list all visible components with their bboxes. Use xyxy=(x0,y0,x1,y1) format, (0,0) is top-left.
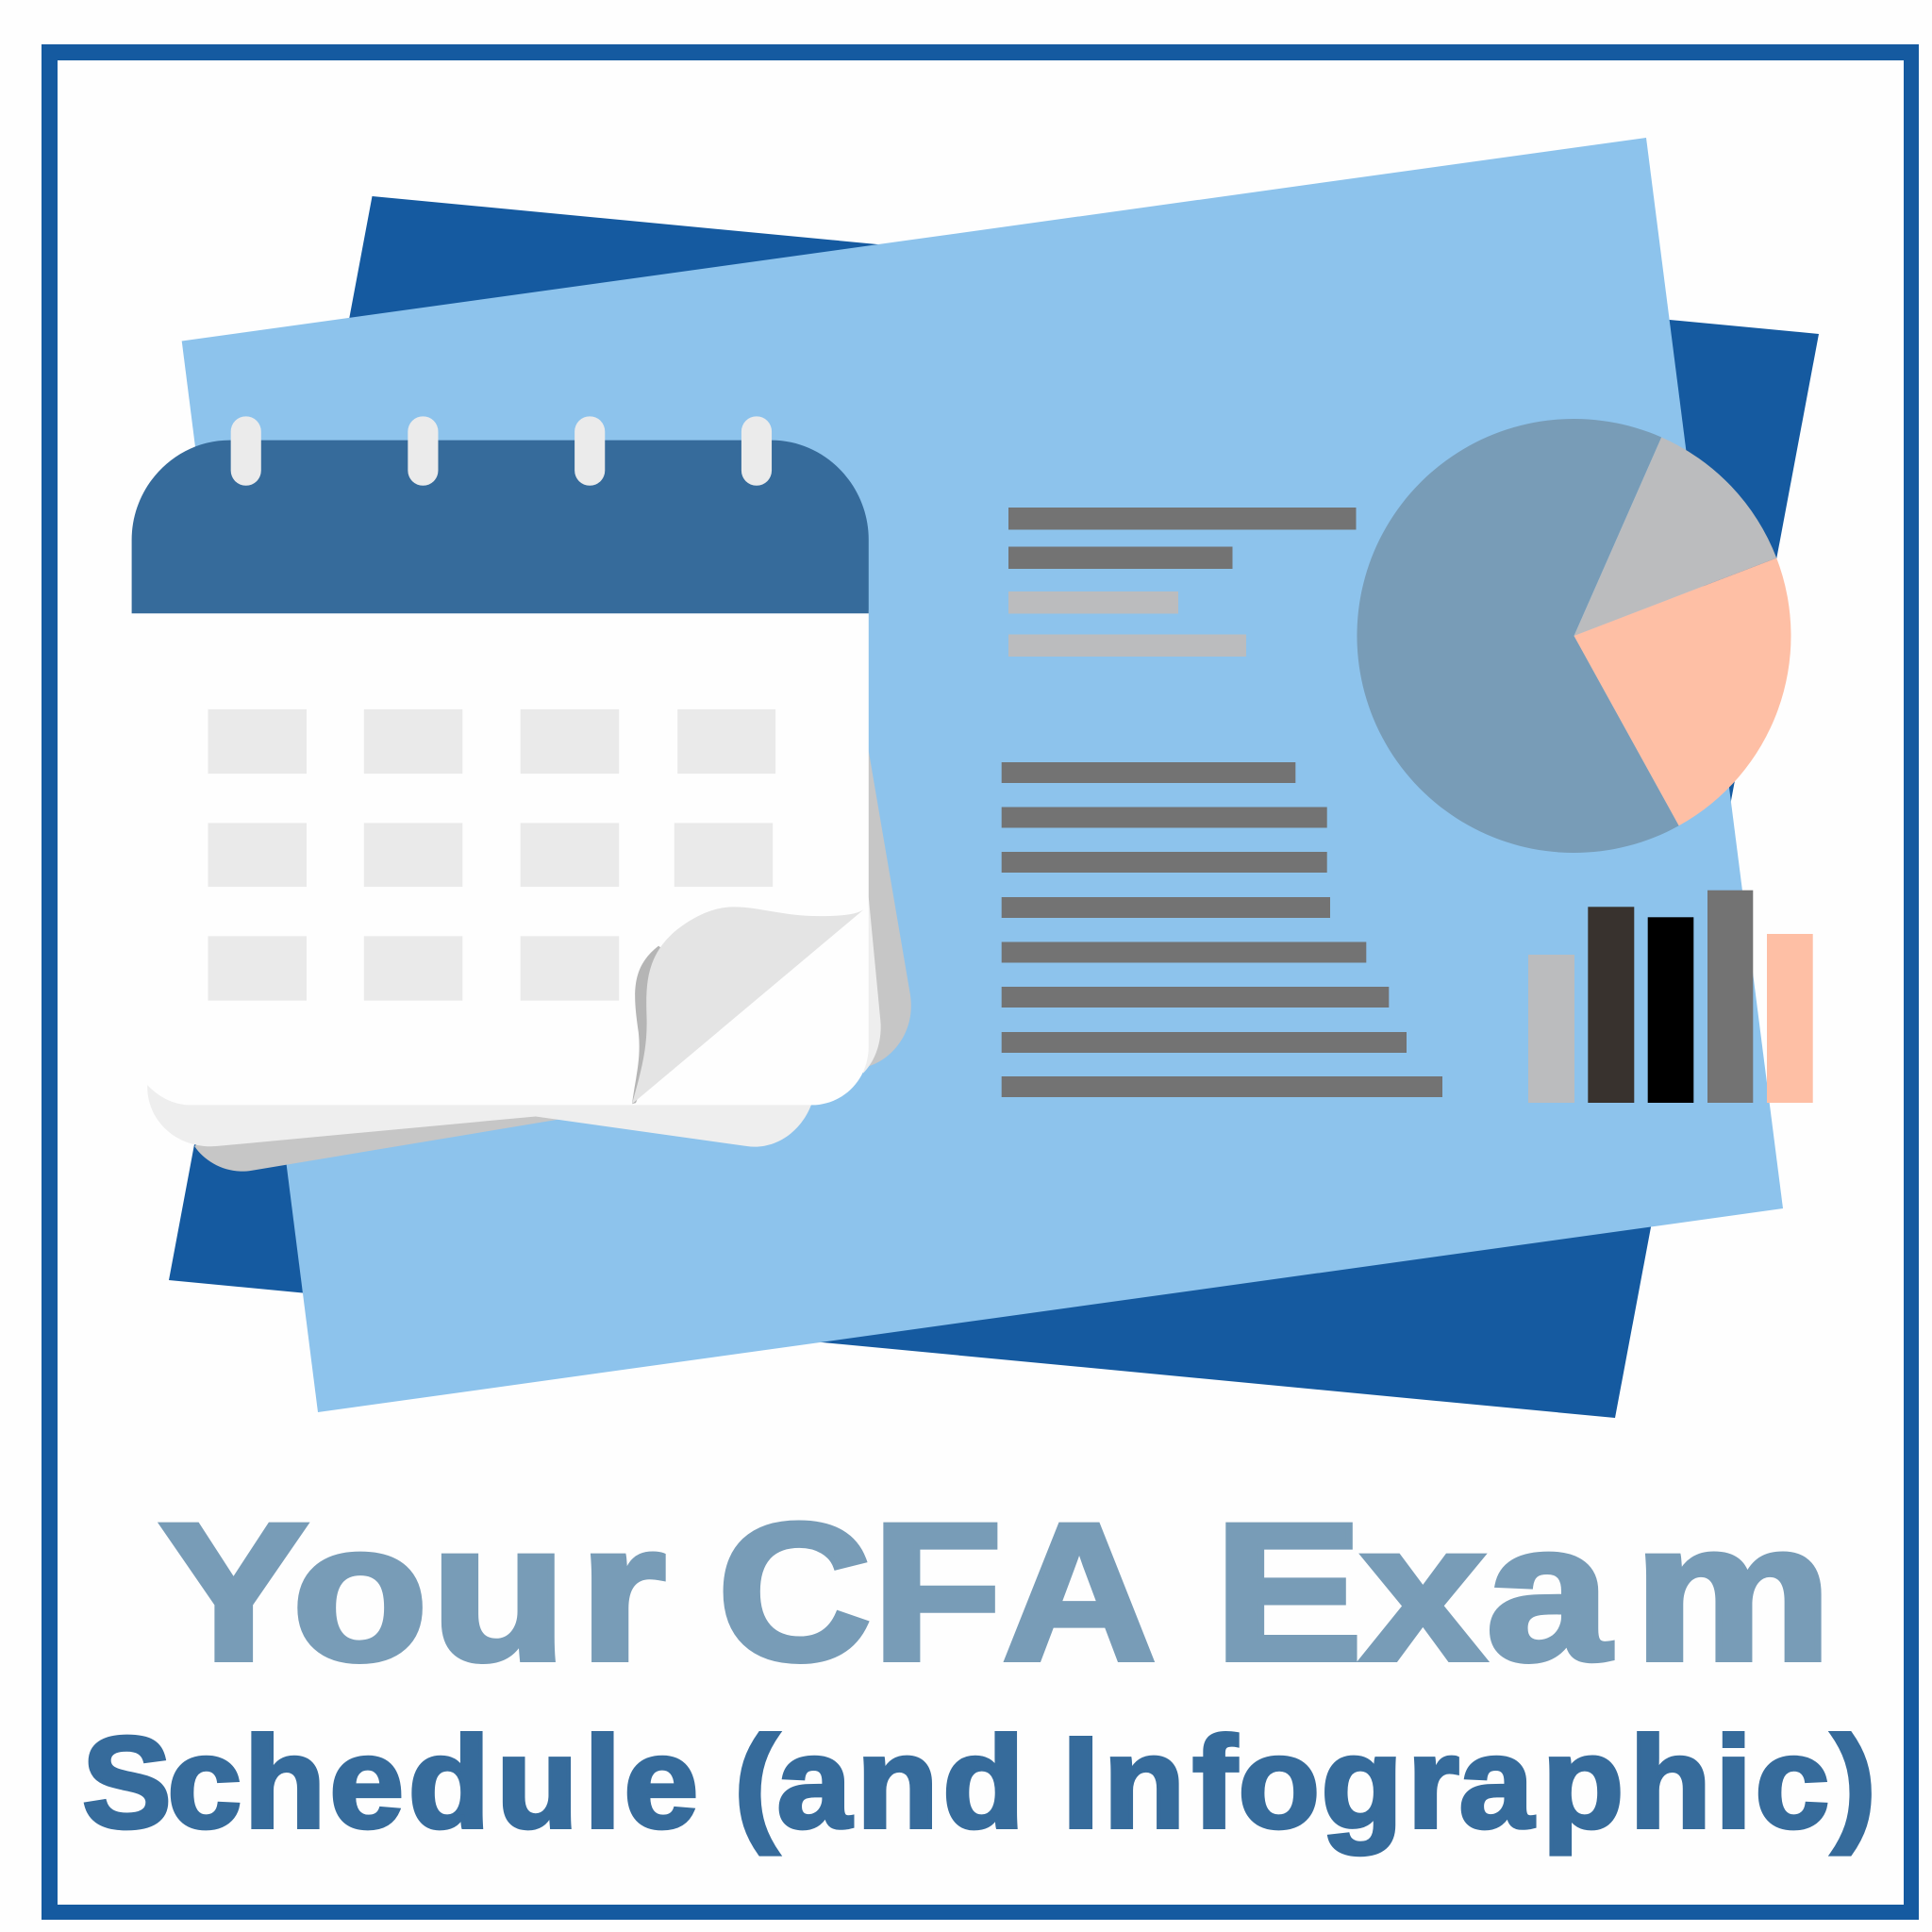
calendar binding rings xyxy=(231,416,772,486)
subtitle: Schedule (and Infographic) xyxy=(82,1709,1876,1856)
pie chart xyxy=(1357,419,1790,853)
page curl shadow xyxy=(632,946,690,1104)
calendar header xyxy=(132,441,869,613)
calendar middle page, light grey xyxy=(147,897,881,1147)
light blue tilted sheet xyxy=(182,138,1783,1412)
title: CFA xyxy=(718,1483,1156,1701)
calendar back page, grey xyxy=(194,751,911,1172)
text lines, lower list xyxy=(1002,762,1442,1097)
calendar date cells xyxy=(208,709,775,1001)
dark blue tilted panel xyxy=(169,196,1819,1418)
page curl xyxy=(632,907,864,1104)
bar chart xyxy=(1528,891,1813,1103)
title: Exam xyxy=(1214,1483,1832,1702)
title xyxy=(159,1483,1832,1702)
title: Your xyxy=(159,1483,666,1702)
text lines, top group xyxy=(1008,508,1357,657)
calendar icon xyxy=(132,416,911,1172)
calendar white body xyxy=(132,610,869,1105)
